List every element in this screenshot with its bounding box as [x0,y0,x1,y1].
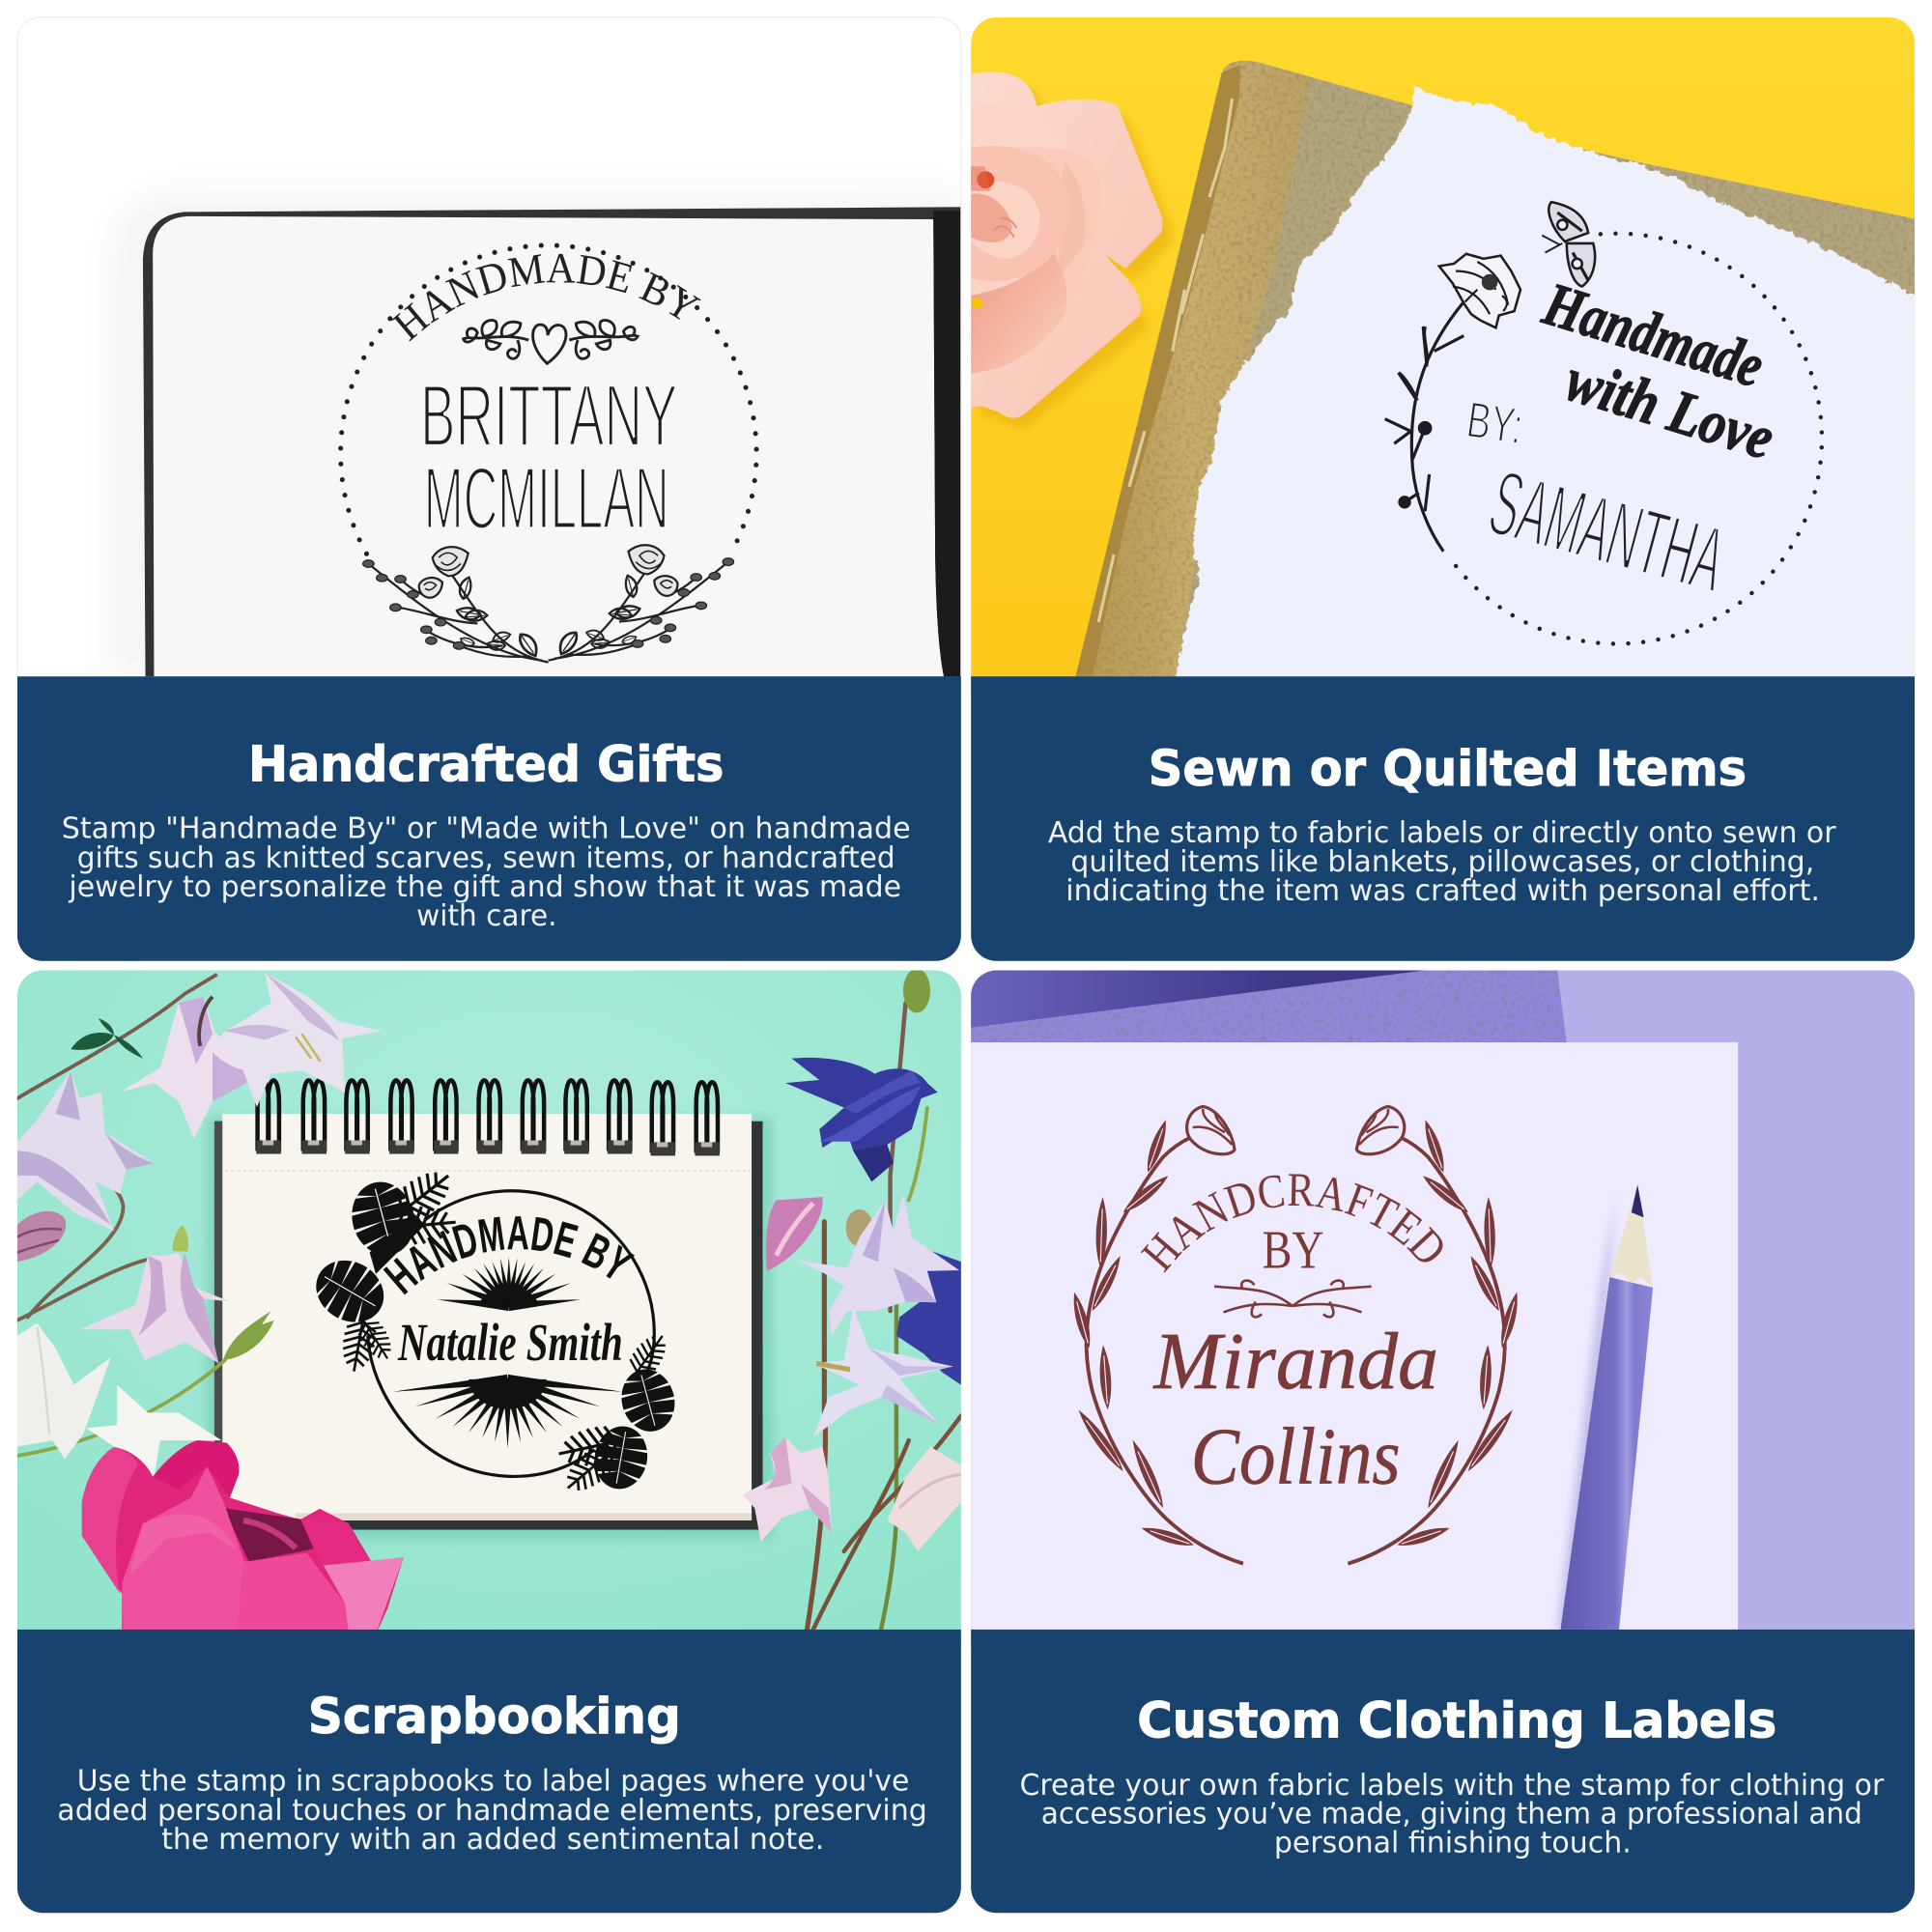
caption background [971,676,1915,961]
caption background [17,676,961,961]
floral branch right [549,545,734,661]
body text: jewelry to personalize the gift and show that it was made [68,870,901,904]
body text [1019,1769,1885,1861]
floral branch left [363,547,549,663]
panel: Handcrafted Gifts [16,16,962,961]
stamp: Handmade By Natalie Smith [316,1173,674,1491]
right wreath [1348,1106,1522,1564]
body text: personal finishing touch. [1274,1827,1632,1861]
stamp text: handmade by: HANDMADE BY [392,253,701,342]
photo: white paper [971,1042,1738,1634]
heading: Custom Clothing Labels [1137,1692,1776,1749]
body text: quilted items like blankets, pillowcases, or clothing, [1070,845,1814,879]
body text: Add the stamp to fabric labels or directly onto sewn or [1048,816,1836,850]
stamp text: McMillan: MCMILLAN [424,450,669,548]
dotted circle [1453,234,1822,643]
stamp text: By: BY: [1463,392,1526,455]
stamp text: Collins: Collins [1191,1412,1401,1502]
body text: accessories you’ve made, giving them a professional and [1041,1798,1862,1832]
panel: Sewn or Quilted Items [971,17,1932,961]
stamp text: handcrafted: HANDCRAFTED [1140,1174,1443,1273]
stamp text: with Love: with Love [1558,345,1781,472]
stamp text: handmade by: HANDMADE BY [383,1216,636,1294]
heading: Scrapbooking [308,1689,681,1746]
body text [1048,816,1836,908]
stems [17,976,961,1630]
notebook photo [111,191,961,676]
icon: heart ornament [464,320,638,363]
photo: spiral notebook [207,1080,773,1539]
body text [62,811,911,933]
body text: Stamp "Handmade By" or "Made with Love" on handmade [62,811,911,845]
photo: cardboard backing [1076,61,1915,676]
stamp: Handcrafted By Miranda Collins [1074,1105,1518,1565]
panel: Scrapbooking [17,970,961,1913]
caption background [17,1630,961,1915]
stamp text: Brittany: BRITTANY [420,368,678,466]
sunburst bottom [392,1375,623,1448]
icon: pink rose [971,71,1173,430]
stamp: Handmade with Love Samantha [1385,202,1822,643]
body text: the memory with an added sentimental note. [161,1823,824,1857]
caption background [971,1630,1915,1915]
body text [57,1764,927,1857]
photo: lilac folder [971,970,1567,1043]
stamp text: Handmade: Handmade [1536,269,1772,400]
icon: butterfly [1542,202,1595,287]
icon: pencil [1560,1184,1653,1630]
heading: Sewn or Quilted Items [1149,741,1747,798]
photo: pink peony [82,1440,404,1637]
sunburst top [437,1257,582,1311]
stamp: Handmade By Brittany McMillan [338,243,759,664]
photo: torn paper [1173,86,1932,696]
body text: added personal touches or handmade elements, preserving [57,1794,927,1828]
stamp text: Miranda: Miranda [1153,1317,1438,1406]
stamp text: Natalie Smith: Natalie Smith [397,1313,623,1372]
body text: indicating the item was crafted with personal effort. [1065,874,1820,908]
body text: Create your own fabric labels with the stamp for clothing or [1019,1769,1885,1803]
panel: Custom Clothing Labels [971,970,1915,1913]
body text: gifts such as knitted scarves, sewn items, or handcrafted [77,841,895,875]
body text: Use the stamp in scrapbooks to label pages where you've [77,1764,909,1798]
tropical leaves [302,1161,687,1500]
body text: with care. [416,899,557,933]
photo: green leaf and buds [71,969,930,1360]
photo: pencil shadow [1557,1194,1616,1630]
heading: Handcrafted Gifts [248,737,724,794]
stamp text: By: BY [1263,1221,1324,1281]
icon: carnation stem [1385,254,1520,552]
dotted circle [341,245,756,554]
photo: columbine flowers left [17,972,382,1477]
left wreath [1069,1106,1243,1564]
ornament [1214,1281,1372,1317]
photo: columbine flowers right [743,1058,961,1551]
